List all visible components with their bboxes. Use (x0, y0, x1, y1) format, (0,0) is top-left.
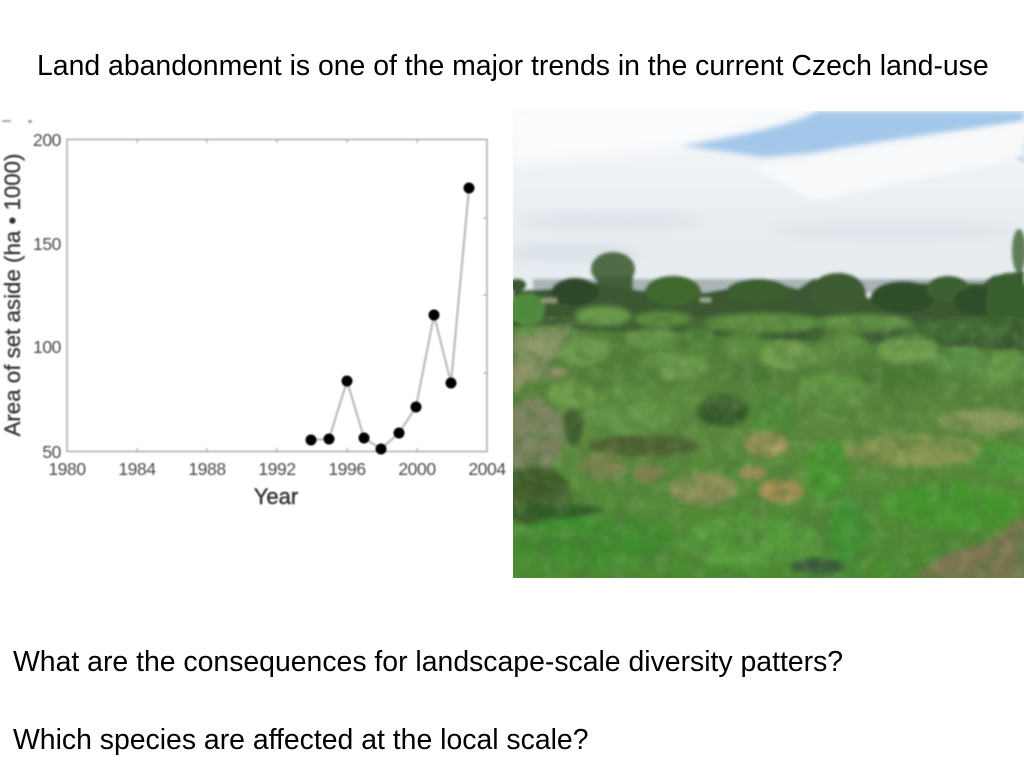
x axis tick labels: 2000 (398, 459, 436, 479)
dry grass and path (499, 323, 1024, 578)
question: local scale species: Which species are affected at the local scale? (13, 724, 588, 756)
data points (306, 182, 474, 454)
shrubs (514, 306, 1024, 457)
y axis tick labels: 50 (42, 442, 62, 462)
line chart: area of set aside by year (0, 119, 506, 509)
title: Land abandonment is one of the major trends in the current Czech land-use (37, 50, 989, 82)
data line (311, 188, 469, 449)
x axis tick labels: 1992 (258, 459, 296, 479)
y axis tick labels: 200 (33, 130, 62, 150)
x axis tick labels: 1988 (188, 459, 226, 479)
x axis tick labels (48, 459, 506, 479)
ground (513, 316, 1024, 321)
x axis tick labels: 2004 (468, 459, 506, 479)
x axis tick labels: 1984 (118, 459, 156, 479)
photo: overgrown abandoned land (513, 111, 1024, 578)
y axis tick labels (33, 130, 62, 462)
scan marks (2, 120, 32, 123)
x axis title: Year (254, 484, 298, 509)
question: diversity patterns: What are the consequences for landscape-scale diversity patters? (13, 646, 843, 678)
sky (503, 111, 1024, 311)
x axis tick labels: 1980 (48, 459, 86, 479)
plot frame (67, 139, 487, 452)
x axis tick labels: 1996 (328, 459, 366, 479)
y axis tick labels: 150 (33, 234, 62, 254)
y axis tick labels: 100 (33, 337, 62, 357)
tree line (508, 229, 1024, 351)
foliage texture (513, 316, 1024, 578)
y axis title: Area of set aside (ha • 1000) (0, 154, 25, 436)
